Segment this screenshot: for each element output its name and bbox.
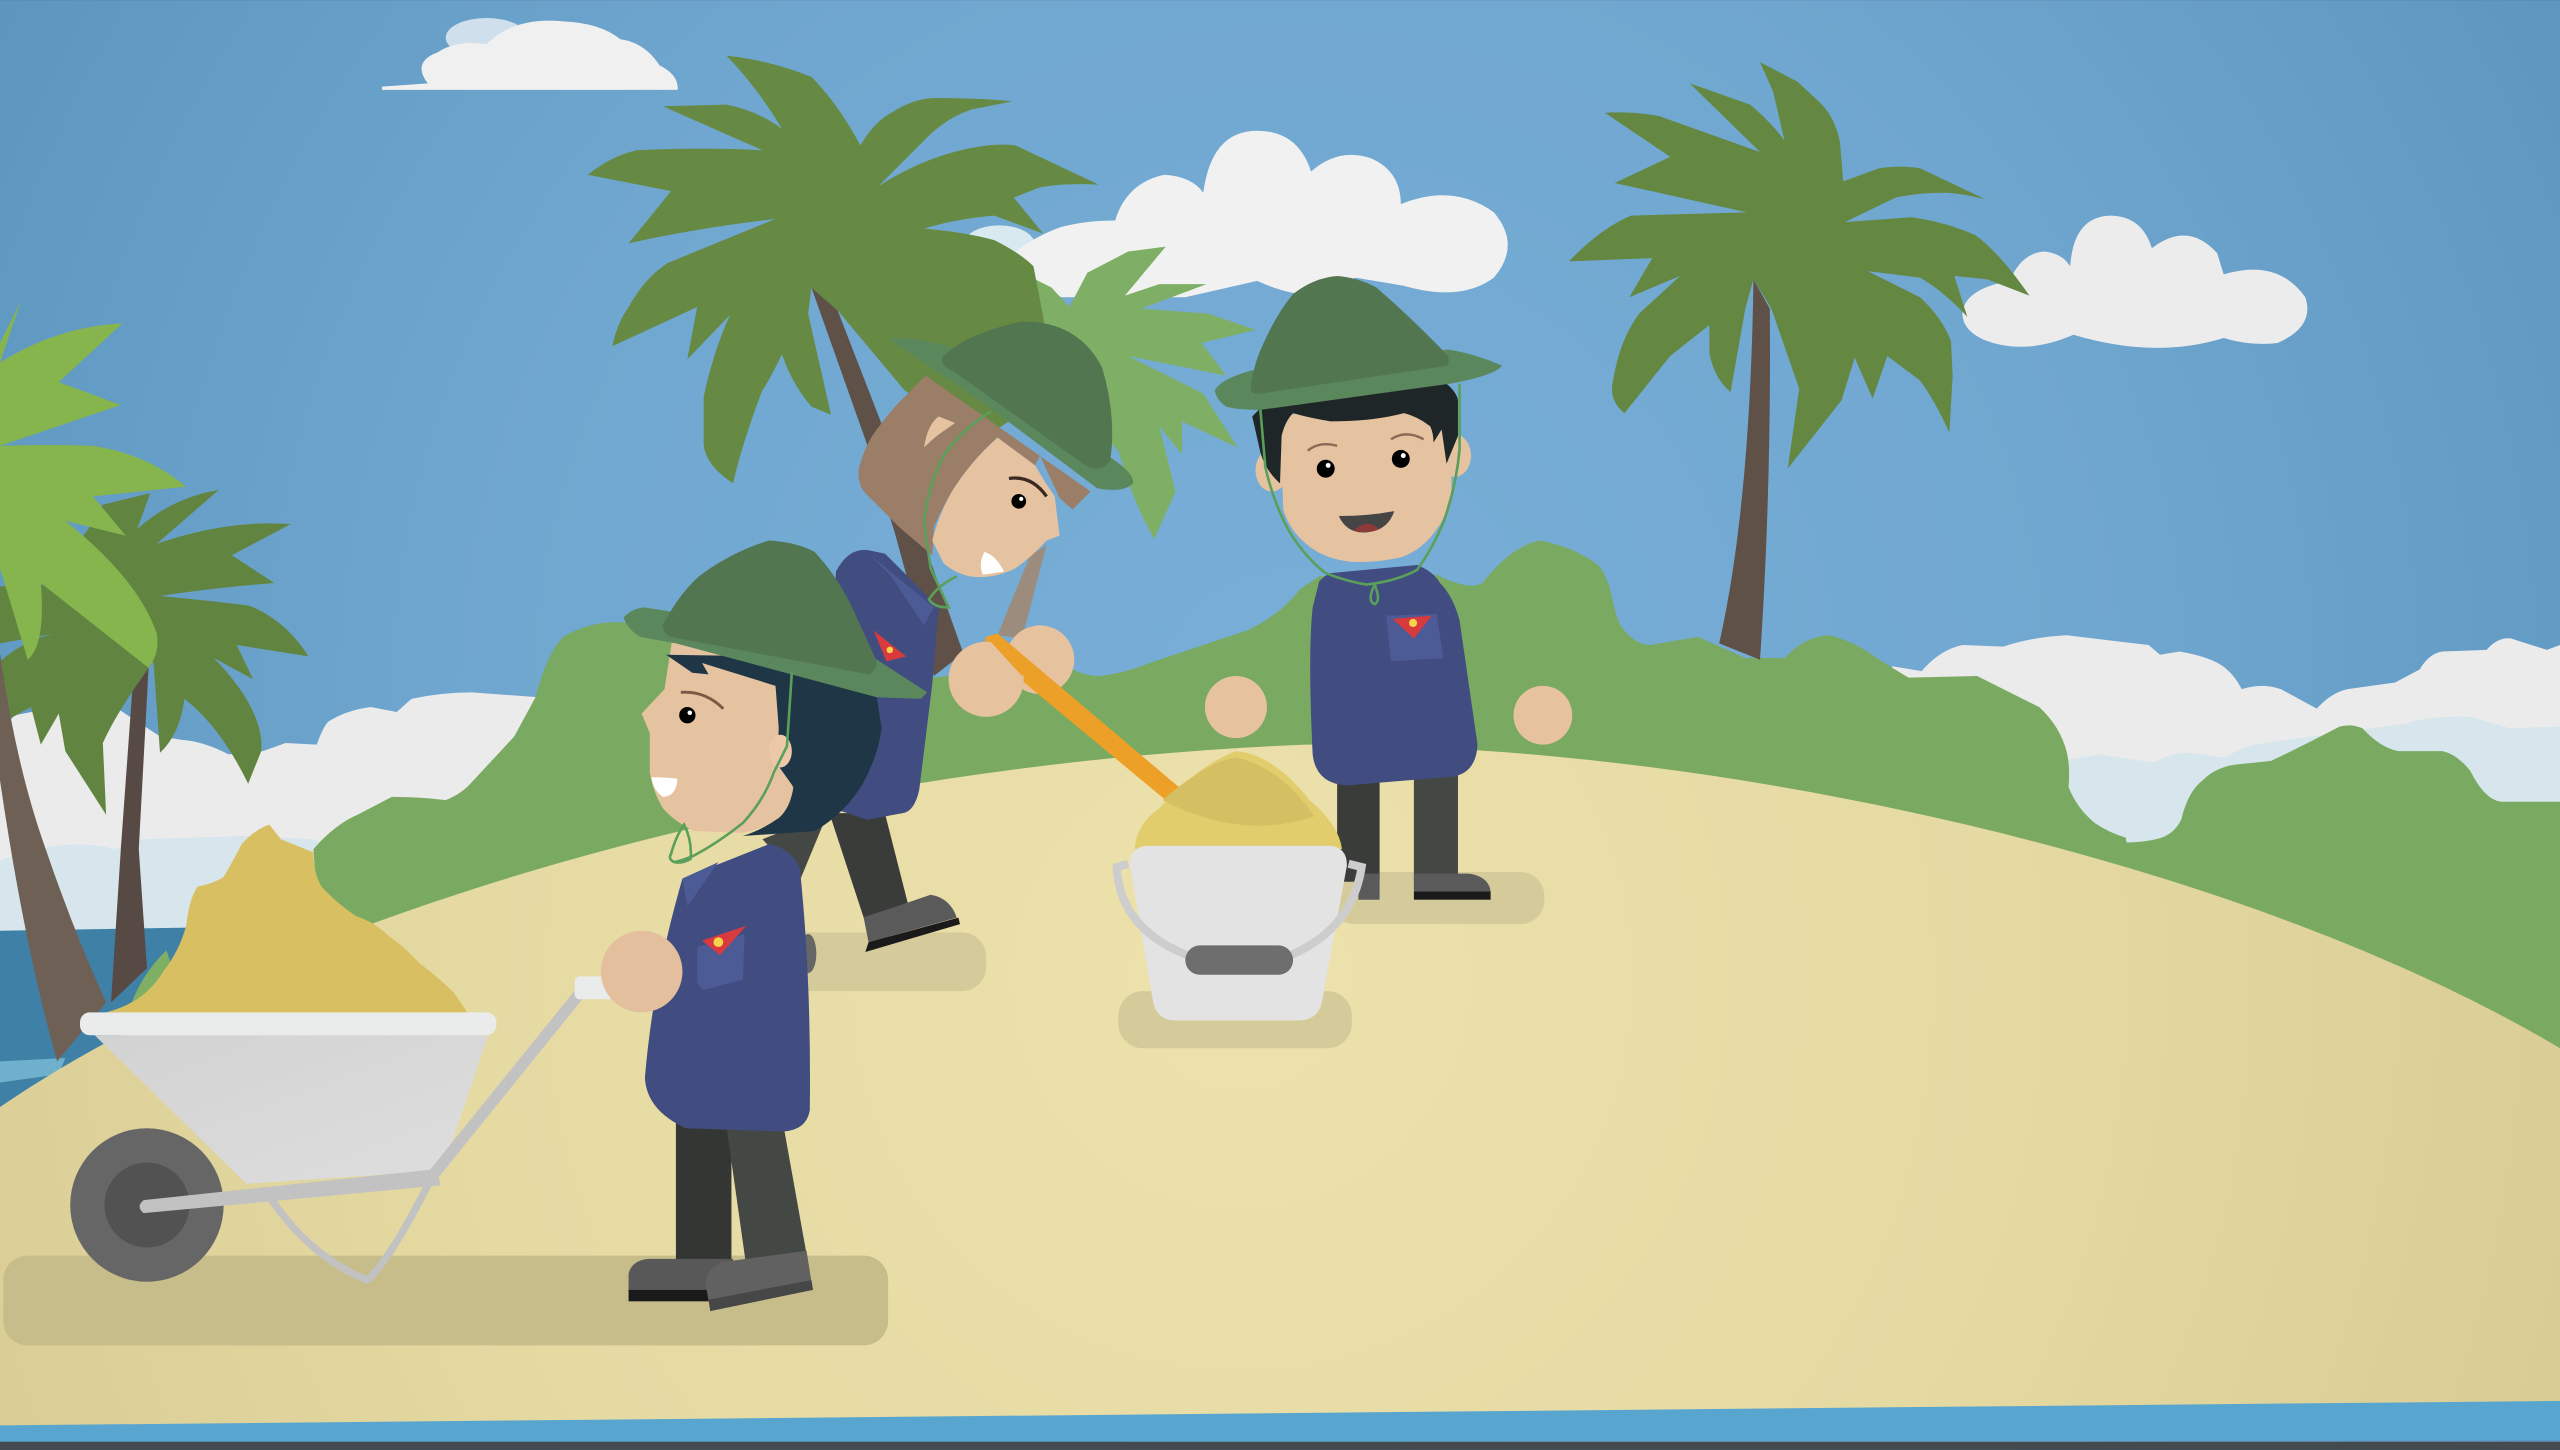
wheelbarrow with sand [70,825,614,1282]
eye and brow [679,692,723,723]
volunteer: middle, digging with shovel [762,322,1179,973]
tooth [651,777,678,797]
legs and shoes [762,813,960,973]
sand pile [106,825,469,1014]
front hand [949,642,1024,717]
stand legs [269,1179,431,1280]
cloud: small top left [382,18,678,90]
sand island [0,745,2560,1430]
ear [769,735,792,767]
handle [433,989,583,1176]
tray [95,1035,488,1184]
hills centre [313,541,2139,1045]
hat [1215,276,1502,410]
hair [666,655,882,836]
cloud: centre [963,131,1508,297]
chin strap [924,412,991,607]
palm tree: right [1569,62,2029,660]
bucket grip [1185,945,1293,975]
face [932,438,1060,577]
pocket and badge [1386,614,1443,661]
pocket and badge [697,926,746,989]
horizon clouds left [0,692,539,939]
sand mound inner [1162,758,1314,826]
palm tree: large centre [588,56,1099,676]
hat [890,322,1133,490]
shadow: wheelbarrow and front volunteer [3,1256,888,1345]
cloud: right [1962,216,2307,348]
shadow: middle volunteer [767,932,986,991]
horizon clouds right [1892,635,2560,865]
grip [575,976,614,999]
legs and shoes [629,1118,813,1311]
bucket of sand [1117,751,1362,1021]
chin strap [1260,384,1460,604]
face [642,637,793,833]
palm tree: back light [906,247,1256,539]
legs and shoes [1337,767,1491,900]
bucket body [1130,846,1347,1021]
rim [80,1012,496,1035]
hands [1205,676,1572,745]
green mound behind sand [127,950,188,1016]
hills back right [2106,725,2560,1094]
sand mound [1135,751,1342,849]
back hand [1006,625,1074,694]
shadow: right volunteer [1331,872,1544,924]
chin strap [670,673,792,863]
shovel shaft [985,634,1179,800]
jacket [645,844,810,1132]
eye and brow [1009,478,1047,509]
collar [869,554,934,625]
ears [1256,434,1471,492]
volunteer: front, pushing wheelbarrow [601,541,927,1311]
face [1280,392,1451,562]
hair [1252,384,1458,483]
tooth [981,552,1004,575]
frame [140,1169,441,1213]
hand [601,931,682,1012]
badge [873,630,906,661]
palm tree: left bright [0,301,186,1061]
sea left [0,924,392,1127]
ocean strip bottom [0,1401,2560,1450]
palm tree: left dark [0,490,309,1003]
eyes [1308,434,1424,478]
wheel [70,1128,224,1282]
shovel handle [998,545,1047,638]
mouth [1339,511,1394,532]
volunteer: right, standing [1205,276,1572,900]
jacket [1310,565,1478,785]
ear [924,416,955,447]
hat [624,541,927,699]
collar [682,862,718,906]
bucket handle [1117,864,1362,957]
hair [858,376,1091,555]
jacket [800,550,939,820]
shadow: bucket [1118,991,1352,1048]
